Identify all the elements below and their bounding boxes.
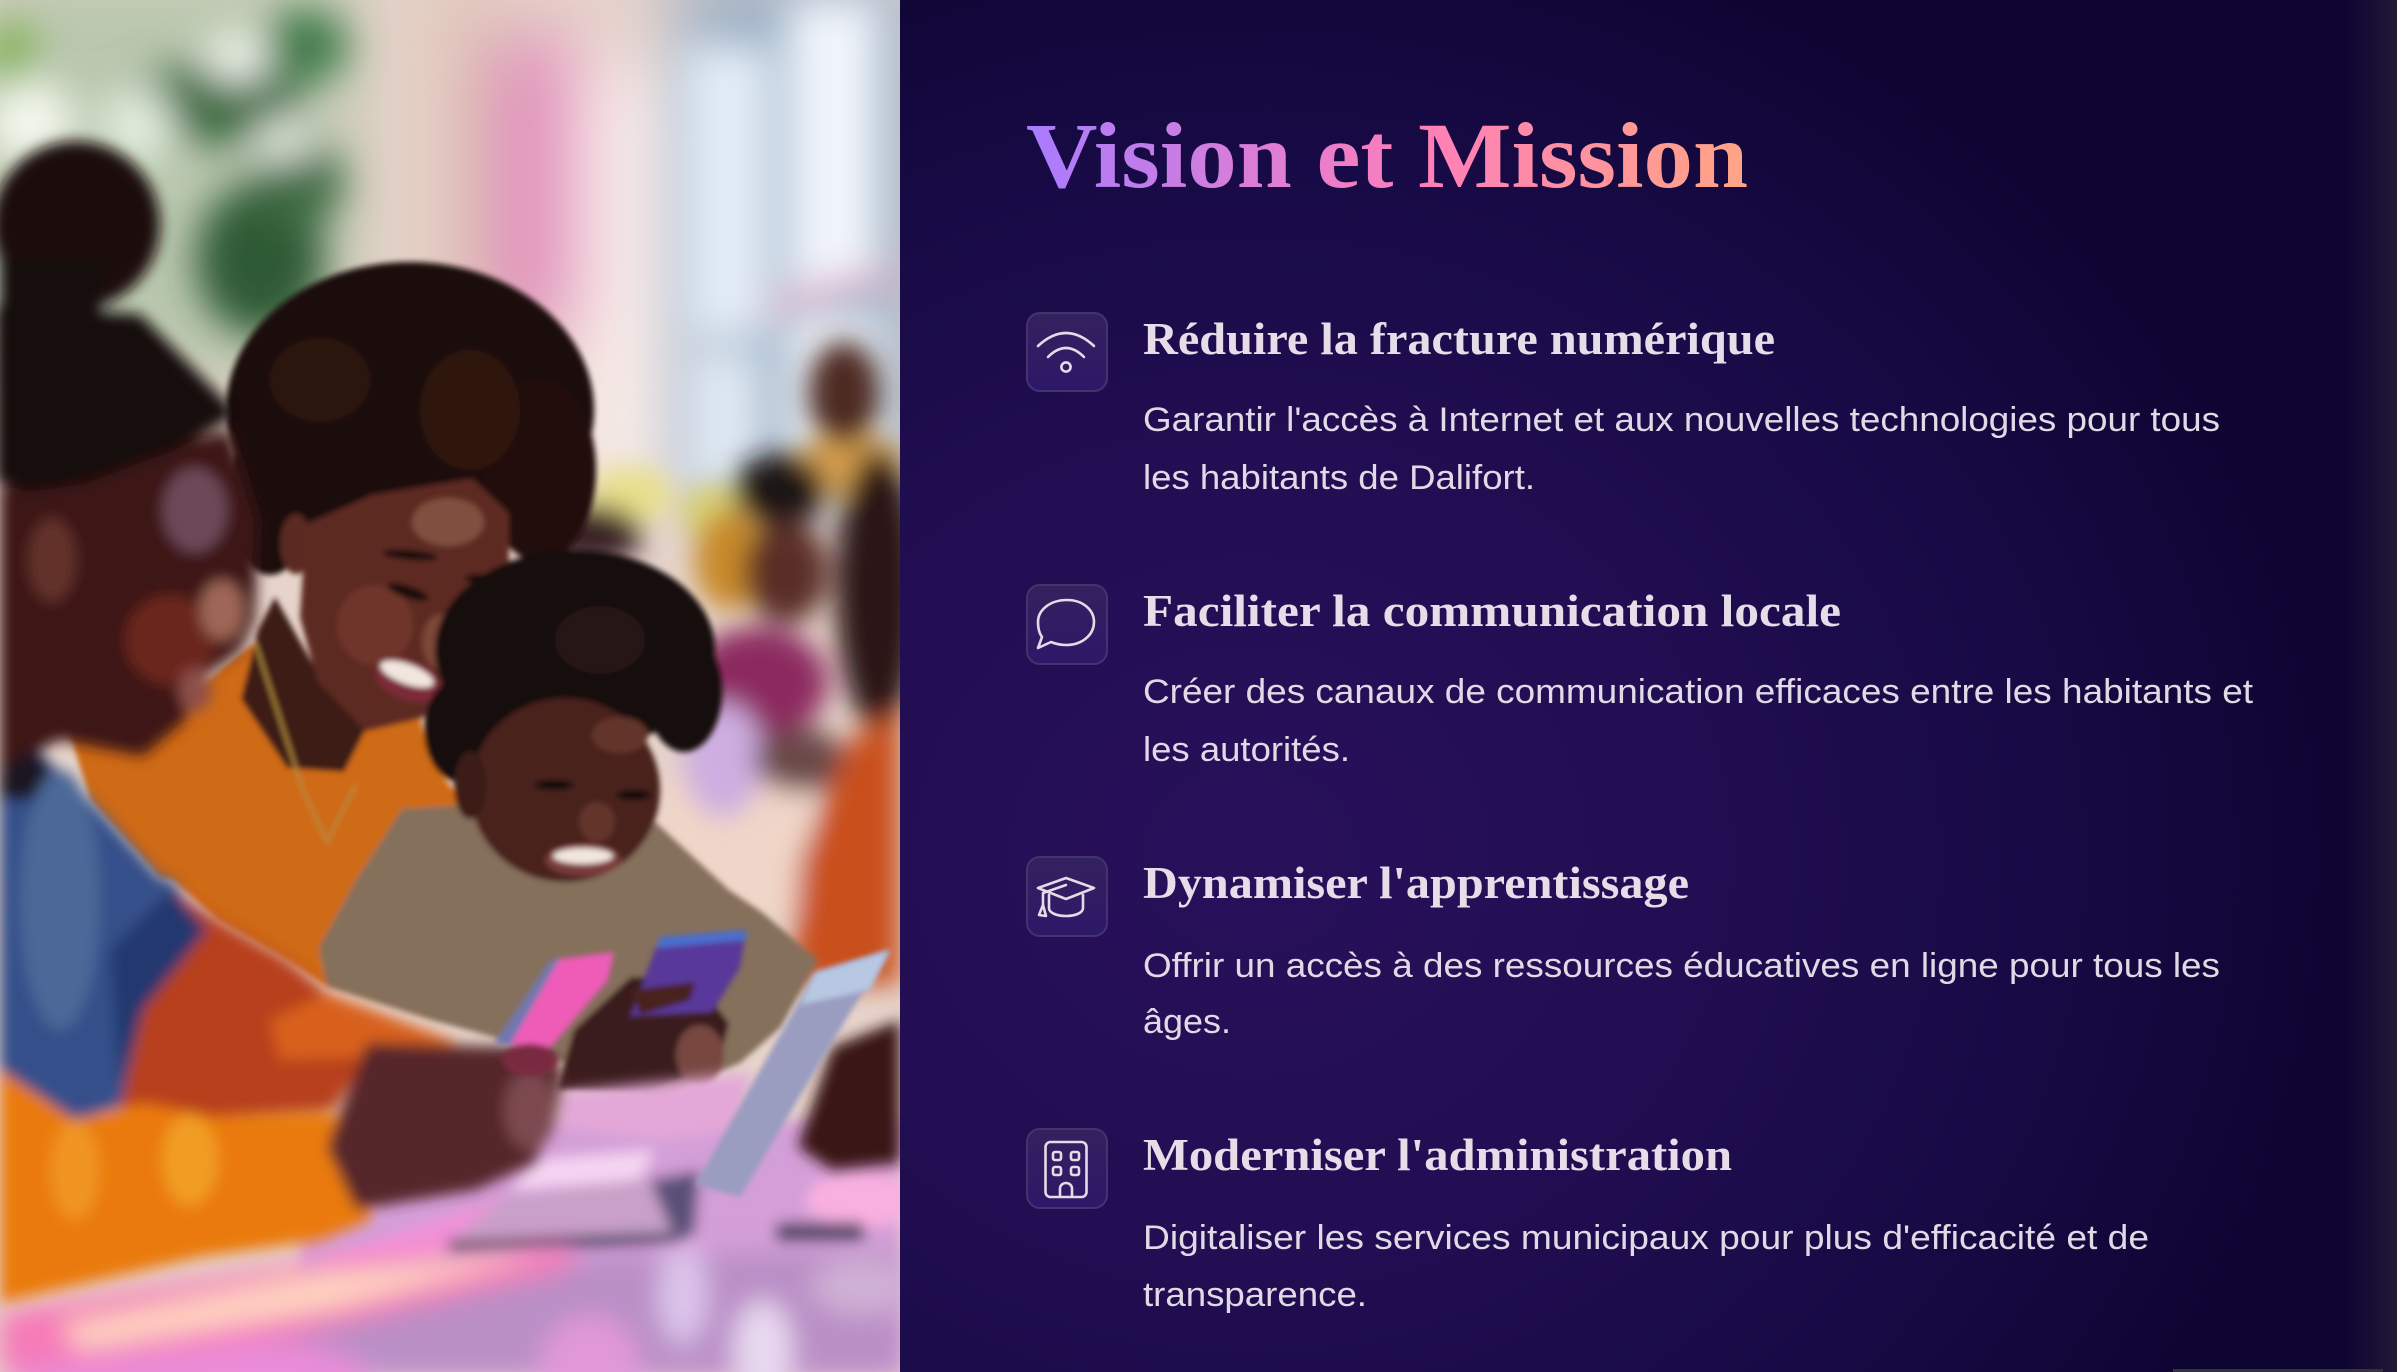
text block: Garantir l'accès à Internet et aux nouvelles technologies pour tous [1143, 401, 2220, 439]
text block: transparence. [1143, 1276, 1367, 1314]
heading: Moderniser l'administration [1143, 1130, 1732, 1180]
text block: Offrir un accès à des ressources éducatives en ligne pour tous les [1143, 947, 2220, 985]
text block: Digitaliser les services municipaux pour plus d'efficacité et de [1143, 1219, 2149, 1257]
heading: Réduire la fracture numérique [1143, 314, 1775, 364]
laptop and right hand [695, 950, 900, 1197]
icon: wifi [1027, 313, 1107, 391]
text block: les autorités. [1143, 731, 1350, 769]
text block: les habitants de Dalifort. [1143, 459, 1535, 497]
purple phone [629, 930, 746, 1017]
text block: âges. [1143, 1003, 1231, 1041]
text block [1143, 1219, 2149, 1314]
title: Vision et Mission [1026, 105, 1748, 208]
text block [1143, 947, 2220, 1041]
icon: graduation cap [1027, 857, 1107, 936]
heading: Dynamiser l'apprentissage [1143, 858, 1689, 908]
heading: Faciliter la communication locale [1143, 586, 1841, 636]
item: dynamiser l'apprentissage [1027, 857, 2220, 1041]
text block [1143, 401, 2220, 497]
child's hands [557, 977, 729, 1093]
icon: speech bubble [1027, 585, 1107, 664]
woman and child [69, 262, 818, 1100]
panel: photo of family using phones and laptops [0, 0, 920, 1372]
table foreground [0, 1245, 911, 1372]
item: réduire la fracture numérique [1027, 313, 2220, 497]
text block: Créer des canaux de communication efficaces entre les habitants et [1143, 673, 2253, 711]
pink phone [494, 952, 614, 1076]
item: moderniser l'administration [1027, 1129, 2149, 1314]
item: faciliter la communication locale [1027, 585, 2253, 769]
panel: vision and mission background [900, 0, 2397, 1372]
notebook and table top [300, 1073, 916, 1372]
icon: building [1027, 1129, 1107, 1208]
text block [1143, 673, 2253, 769]
man in the foreground [0, 141, 563, 1303]
